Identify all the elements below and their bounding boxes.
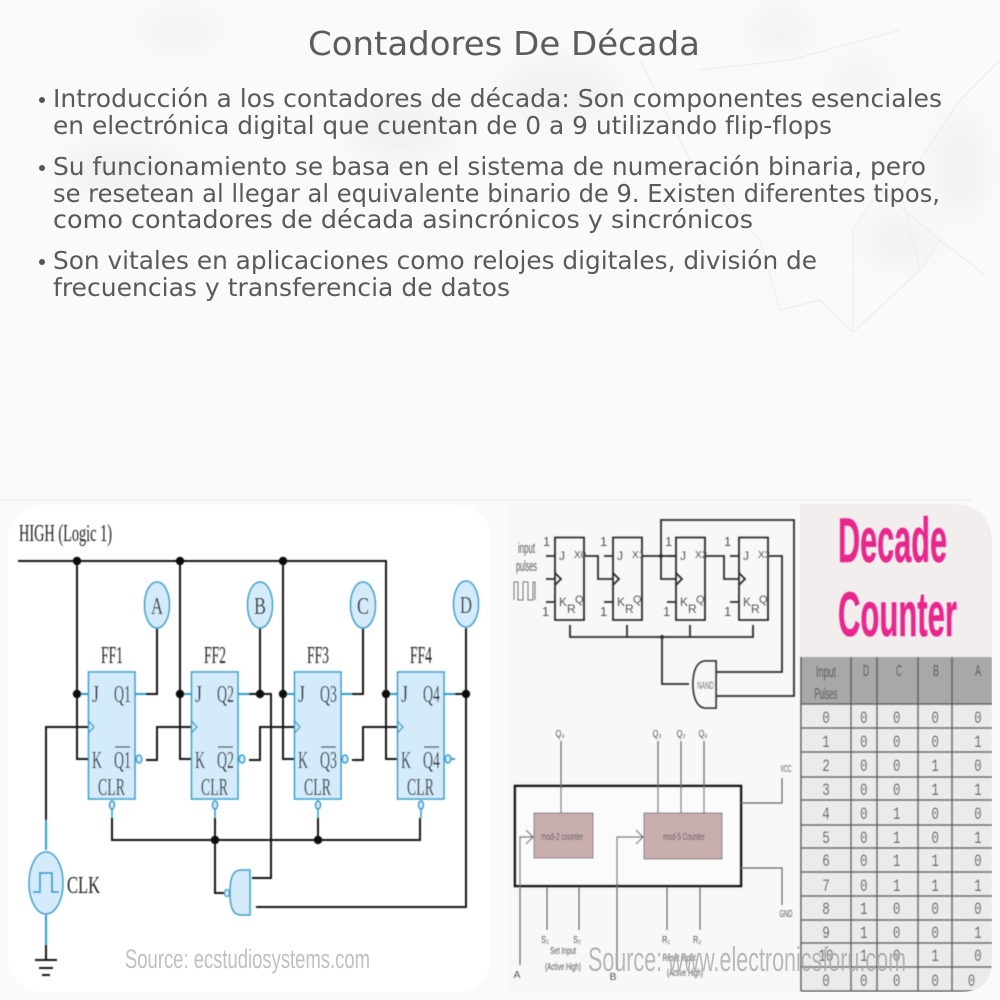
table digits: 1 [931, 851, 939, 872]
flip-flop FF4: Q4 [423, 682, 440, 708]
table digits: 1 [974, 876, 982, 897]
table header: D [863, 663, 869, 680]
table digits: 1 [974, 923, 982, 944]
table digits: 1 [893, 804, 900, 825]
mod counter block diagram: Reset Input [662, 953, 696, 964]
JK flip-flop diagram: 1 [663, 604, 670, 619]
table header: A [975, 663, 981, 680]
JK flip-flop diagram: Q [696, 594, 705, 606]
JK flip-flop diagram: K [559, 595, 567, 609]
table digits: 0 [893, 732, 900, 753]
JK flip-flop diagram: J [559, 549, 565, 563]
mod counter block diagram [514, 729, 792, 983]
JK flip-flop diagram: 1 [724, 604, 731, 619]
output C [350, 582, 376, 628]
table digits: 5 [822, 828, 830, 849]
table digits: 0 [974, 708, 982, 729]
table digits: 0 [860, 708, 868, 729]
output C: C [357, 594, 369, 620]
clock source [29, 852, 100, 914]
mod counter block diagram: S₂ [573, 935, 581, 946]
table digits: 1 [931, 756, 939, 777]
table digits: 0 [931, 828, 939, 849]
mod counter block diagram: Q₃ [652, 729, 662, 740]
mod counter block diagram: Set Input [550, 946, 576, 957]
output A [144, 582, 170, 628]
JK flip-flop diagram: 1 [543, 534, 550, 549]
table digits: 3 [822, 780, 830, 801]
table digits: 1 [974, 732, 982, 753]
table digits: 1 [893, 828, 900, 849]
JK flip-flop diagram: X3 [758, 550, 771, 561]
JK flip-flop diagram: K [617, 595, 625, 609]
table header [814, 664, 982, 700]
table digits: 0 [860, 804, 868, 825]
table digits: 8 [822, 899, 830, 920]
mod counter block diagram: Q₀ [698, 729, 708, 740]
clock source: CLK [67, 873, 100, 899]
table header: B [933, 663, 939, 680]
mod counter block diagram: GND [780, 909, 792, 920]
flip-flop FF2: Q2 [217, 748, 234, 774]
flip-flop FF2 [192, 643, 238, 801]
mod counter block diagram: mod-5 Counter [663, 832, 705, 843]
panel: flip-flop circuit [8, 505, 491, 992]
bullet 2: se resetean al llegar al equivalente binario de 9. Existen diferentes tipos, [53, 179, 940, 208]
flip-flop FF2: Q2 [217, 682, 234, 708]
title: Contadores De Década [308, 24, 700, 63]
junction dots [73, 557, 470, 844]
table digits: 1 [893, 851, 900, 872]
source caption: Source: ecstudiosystems.com [125, 944, 370, 974]
mod counter block diagram: A [514, 970, 521, 981]
flip-flop FF4: CLR [407, 775, 434, 801]
JK flip-flop diagram: J [743, 549, 749, 563]
table digits: 0 [860, 756, 868, 777]
table digits: 9 [822, 923, 830, 944]
mod counter block diagram: (Active High) [667, 968, 703, 979]
table digits: 0 [893, 756, 900, 777]
output B [248, 582, 272, 628]
JK flip-flop diagram: Q [759, 594, 768, 606]
table digits: 1 [860, 923, 868, 944]
mod counter block diagram: B [610, 972, 617, 983]
table digits: 0 [893, 923, 900, 944]
table digits: 0 [860, 971, 868, 992]
JK flip-flop diagram: pulses [516, 558, 537, 575]
JK flip-flop diagram [514, 520, 794, 708]
JK flip-flop diagram: R [688, 602, 697, 616]
table digits: 1 [822, 732, 830, 753]
truth table [801, 657, 992, 992]
output D: D [460, 593, 472, 619]
JK flip-flop diagram: R [567, 602, 576, 616]
table digits: 0 [893, 946, 900, 967]
flip-flop FF4 [398, 643, 444, 801]
table digits: 0 [860, 828, 868, 849]
label: high logic: HIGH (Logic 1) [19, 521, 112, 547]
background texture [0, 10, 1000, 500]
mod counter block diagram: Q₂ [676, 729, 686, 740]
table digits: 4 [822, 804, 830, 825]
mod counter block diagram: (Active High) [545, 962, 581, 973]
flip-flop FF1: Q1 [114, 748, 131, 774]
flip-flop FF2: CLR [201, 775, 228, 801]
output A: A [151, 594, 163, 620]
mod counter block diagram: VCC [780, 764, 792, 775]
table digits: 0 [860, 780, 868, 801]
bullet 2: como contadores de década asincrónicos y sincrónicos [53, 205, 753, 234]
table digits: 0 [893, 780, 900, 801]
flip-flop FF3 [294, 643, 341, 801]
table digits: 1 [974, 780, 982, 801]
JK flip-flop diagram: Q [575, 594, 584, 606]
NAND gate [224, 870, 250, 915]
table digits: 0 [931, 923, 939, 944]
flip-flop FF2: J [195, 682, 202, 708]
table digits: 1 [931, 876, 939, 897]
JK flip-flop diagram: X1 [632, 550, 645, 561]
JK flip-flop diagram: 1 [600, 604, 607, 619]
table digits: 0 [860, 851, 868, 872]
table digits: 0 [893, 708, 900, 729]
table digits: 0 [931, 804, 939, 825]
JK flip-flop diagram: K [743, 595, 751, 609]
flip-flop FF3: K [298, 748, 308, 774]
flip-flop FF3: Q3 [320, 682, 337, 708]
flip-flop FF3: J [298, 682, 305, 708]
table header: Input [816, 664, 836, 681]
table digits: 0 [931, 971, 939, 992]
inversion bubbles [110, 755, 451, 809]
table digits: 7 [822, 876, 830, 897]
JK flip-flop diagram: X2 [695, 550, 708, 561]
table digits: 10 [818, 946, 834, 967]
table digits: 0 [974, 946, 982, 967]
table digits: 0 [974, 851, 982, 872]
mod counter block diagram: R₂ [693, 935, 701, 946]
table digits: 0 [931, 708, 939, 729]
flip-flop FF3: Q3 [320, 748, 337, 774]
table digits [818, 708, 982, 992]
bullet 2 [39, 152, 940, 234]
bullet list text [39, 84, 942, 302]
table digits: 0 [931, 899, 939, 920]
table digits: 0 [822, 708, 830, 729]
table digits: 0 [860, 876, 868, 897]
panel: decade counter diagrams [508, 504, 992, 992]
decade counter heading [800, 504, 992, 657]
bullet 3: frecuencias y transferencia de datos [53, 273, 510, 302]
table digits: 6 [822, 851, 830, 872]
flip-flop FF1: CLR [98, 775, 125, 801]
table digits: 0 [893, 971, 900, 992]
flip-flop FF4: J [401, 682, 408, 708]
JK flip-flop diagram: 1 [542, 604, 549, 619]
table digits: 0 [931, 732, 939, 753]
JK flip-flop diagram: R [751, 602, 760, 616]
JK flip-flop diagram: Q [633, 594, 642, 606]
JK flip-flop diagram: input [518, 540, 535, 557]
flip-flop FF3: FF3 [307, 643, 329, 669]
bullet 2: Su funcionamiento se basa en el sistema de numeración binaria, pero [53, 152, 926, 181]
table digits: 0 [860, 732, 868, 753]
mod counter block diagram: Q₄ [556, 729, 564, 740]
flip-flop FF1: FF1 [101, 643, 123, 669]
bullet 1: en electrónica digital que cuentan de 0 a 9 utilizando flip-flops [53, 111, 832, 140]
JK flip-flop diagram: J [680, 549, 686, 563]
flip-flop FF2: FF2 [204, 643, 226, 669]
table header: C [896, 663, 902, 680]
mod counter block diagram: R₁ [662, 935, 670, 946]
flip-flop FF4: Q4 [423, 748, 440, 774]
mod counter block diagram: mod-2 counter [541, 832, 583, 843]
output D [454, 581, 478, 627]
flip-flop FF1 [88, 643, 135, 801]
JK flip-flop diagram: X0 [574, 550, 587, 561]
bullet 1: Introducción a los contadores de década: Son componentes esenciales [53, 84, 942, 113]
bullet 1 [39, 84, 942, 140]
flip-flop FF1: Q1 [114, 682, 131, 708]
flip-flop FF3: CLR [304, 775, 331, 801]
mod counter block diagram: S₁ [541, 935, 549, 946]
JK flip-flop diagram: 1 [665, 534, 672, 549]
JK flip-flop diagram: 1 [600, 534, 607, 549]
table digits: 1 [931, 780, 939, 801]
JK flip-flop diagram: 1 [724, 534, 731, 549]
table digits: 0 [974, 899, 982, 920]
table header: Pulses [814, 686, 838, 703]
table digits: 2 [822, 756, 830, 777]
bullet 3: Son vitales en aplicaciones como relojes digitales, división de [53, 246, 817, 275]
flip-flop FF4: K [401, 748, 411, 774]
table digits: 1 [974, 828, 982, 849]
JK flip-flop diagram: R [625, 602, 634, 616]
table digits: 1 [893, 876, 900, 897]
flip-flop FF1: K [92, 748, 102, 774]
table digits: 1 [931, 946, 939, 967]
flip-flop FF1: J [92, 682, 99, 708]
table digits: 1 [860, 899, 868, 920]
table digits: 0 [968, 971, 975, 992]
flip-flop FF4: FF4 [410, 643, 432, 669]
table digits: 0 [974, 804, 982, 825]
table digits: 1 [860, 946, 868, 967]
table digits: 0 [822, 971, 830, 992]
JK flip-flop diagram: J [617, 549, 623, 563]
JK flip-flop diagram: K [680, 595, 688, 609]
table digits: 0 [893, 899, 900, 920]
bullet 3 [39, 246, 817, 302]
output B: B [254, 594, 266, 620]
flip-flop FF2: K [195, 748, 205, 774]
wiring [18, 561, 466, 975]
table digits: 0 [974, 756, 982, 777]
JK flip-flop diagram: NAND [697, 680, 714, 692]
